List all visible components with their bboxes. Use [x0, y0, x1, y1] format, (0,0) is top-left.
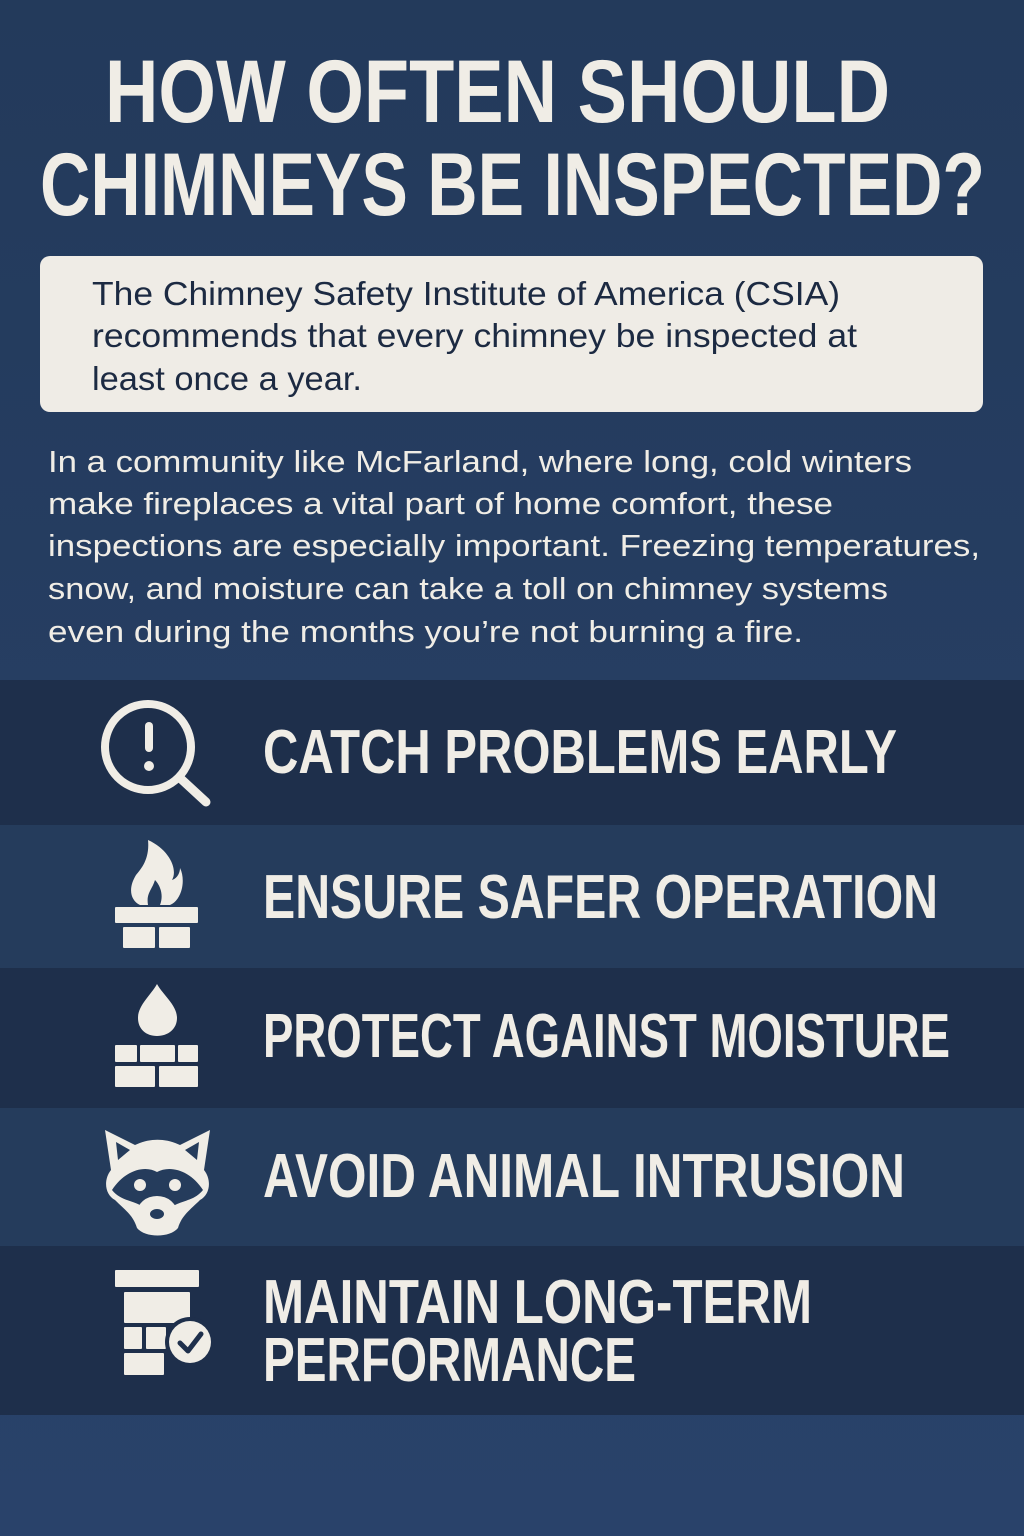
row: maintain long-term performance: PERFORMANCE [263, 1326, 636, 1395]
text block: McFarland paragraph: snow, and moisture can take a toll on chimney systems [48, 571, 888, 606]
text block: McFarland paragraph: In a community like McFarland, where long, cold winters [48, 444, 912, 479]
title [40, 41, 985, 234]
row: protect against moisture [0, 968, 1024, 1108]
row: ensure safer operation [0, 825, 1024, 968]
callout: CSIA recommendation: least once a year. [92, 360, 362, 397]
icon: raccoon face [105, 1130, 210, 1236]
text block: McFarland paragraph: inspections are especially important. Freezing temperatures, [48, 528, 980, 563]
text block: McFarland paragraph: make fireplaces a vital part of home comfort, these [48, 486, 833, 521]
row: avoid animal intrusion [0, 1108, 1024, 1246]
row: maintain long-term performance [0, 1246, 1024, 1415]
callout: CSIA recommendation: recommends that every chimney be inspected at [92, 317, 857, 354]
title: HOW OFTEN SHOULD [105, 41, 890, 141]
row: catch problems early [0, 680, 1024, 825]
icon: chimney with check [115, 1270, 215, 1375]
row: maintain long-term performance: MAINTAIN LONG-TERM [263, 1268, 812, 1337]
icon: fire on bricks [115, 840, 198, 948]
text block: McFarland paragraph [48, 444, 980, 649]
callout: CSIA recommendation [40, 256, 983, 412]
icon: magnifier alert [105, 704, 206, 802]
callout: CSIA recommendation: The Chimney Safety Institute of America (CSIA) [92, 275, 840, 312]
text block: McFarland paragraph: even during the months you’re not burning a fire. [48, 614, 803, 649]
icon: water drop on bricks [115, 984, 198, 1087]
